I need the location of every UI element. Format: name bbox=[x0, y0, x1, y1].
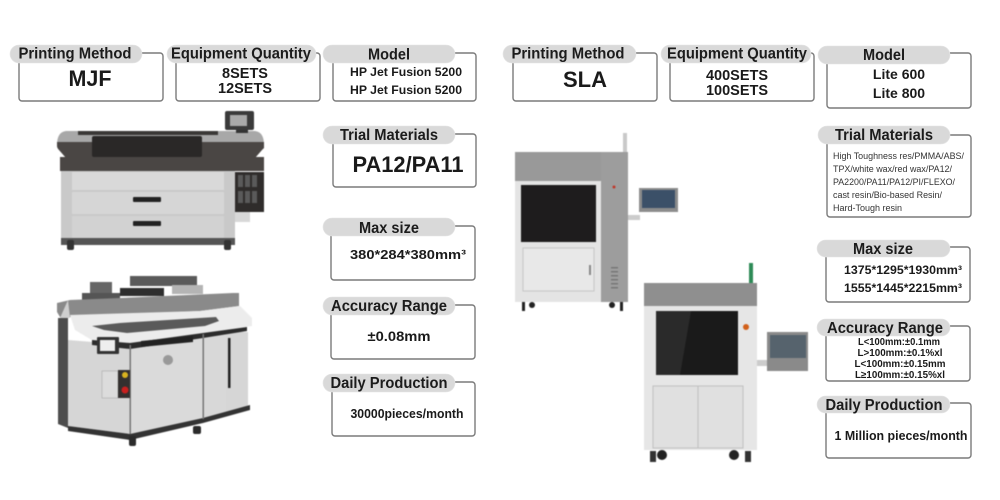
value: set counts: 8SETS bbox=[222, 66, 268, 82]
value: SLA: SLA bbox=[563, 67, 607, 92]
panel: SLA printing method bbox=[503, 45, 657, 101]
heading: printing method: Printing Method bbox=[18, 46, 132, 62]
heading: accuracy range: Accuracy Range bbox=[331, 298, 447, 315]
panel: MJF equipment quantity bbox=[167, 45, 320, 101]
heading: daily production: Daily Production bbox=[826, 397, 942, 414]
value: material list bbox=[833, 151, 964, 213]
panel: SLA daily production bbox=[817, 396, 971, 458]
value: material list: PA2200/PA11/PA12/PI/FLEXO/ bbox=[833, 177, 955, 187]
value: model names: HP Jet Fusion 5200 bbox=[350, 83, 462, 97]
value: material list: cast resin/Bio-based Resin/ bbox=[833, 190, 942, 200]
heading: max size: Max size bbox=[853, 241, 913, 258]
value: set counts: 12SETS bbox=[218, 81, 272, 97]
value: set counts: 100SETS bbox=[706, 83, 768, 99]
value: accuracy lines bbox=[854, 337, 946, 381]
value: set counts bbox=[706, 68, 768, 99]
heading: model: Model bbox=[368, 46, 410, 64]
value: max sizes: 1375*1295*1930mm³ bbox=[844, 263, 962, 277]
heading: accuracy range: Accuracy Range bbox=[827, 320, 943, 337]
heading: equipment quantity: Equipment Quantity bbox=[667, 46, 807, 62]
icon: HP Jet Fusion 3D printer bbox=[57, 276, 252, 446]
value: MJF: MJF bbox=[68, 66, 112, 91]
heading: printing method: Printing Method bbox=[512, 46, 624, 62]
heading: model: Model bbox=[863, 47, 905, 64]
value: daily production: 30000pieces/month bbox=[350, 407, 464, 421]
value: accuracy lines: L>100mm:±0.1%xl bbox=[858, 348, 943, 359]
value: set counts bbox=[218, 66, 272, 97]
value: daily production: 1 Million pieces/month bbox=[834, 429, 968, 443]
panel: SLA trial materials bbox=[818, 126, 971, 217]
panel: SLA accuracy range bbox=[817, 319, 970, 381]
value: model names: Lite 800 bbox=[873, 85, 925, 101]
value: accuracy lines: L<100mm:±0.15mm bbox=[854, 359, 946, 370]
icon: Lite 800 SLA machine bbox=[644, 263, 808, 462]
panel: SLA equipment quantity bbox=[661, 45, 814, 101]
panel: MJF model bbox=[323, 45, 476, 101]
heading: equipment quantity: Equipment Quantity bbox=[171, 46, 311, 62]
value: max sizes bbox=[844, 263, 962, 295]
value: model names bbox=[873, 66, 925, 101]
heading: daily production: Daily Production bbox=[330, 375, 448, 392]
panel: MJF daily production bbox=[323, 374, 475, 436]
value: material list: High Toughness res/PMMA/ABS/ bbox=[833, 151, 964, 161]
value: accuracy lines: L<100mm:±0.1mm bbox=[858, 337, 940, 348]
panel: SLA model bbox=[818, 46, 971, 108]
panel: MJF trial materials bbox=[323, 126, 476, 187]
heading: max size: Max size bbox=[359, 220, 419, 237]
icon: large format MJF printer bbox=[57, 111, 264, 250]
value: model names bbox=[350, 65, 462, 97]
value: material list: TPX/white wax/red wax/PA12/ bbox=[833, 164, 952, 174]
panel: SLA max size bbox=[817, 240, 970, 302]
panel: MJF max size bbox=[323, 218, 475, 280]
value: max size: 380*284*380mm³ bbox=[350, 248, 466, 262]
icon: Lite 600 SLA machine bbox=[515, 133, 678, 311]
value: accuracy: ±0.08mm bbox=[368, 328, 430, 344]
heading: trial materials: Trial Materials bbox=[340, 127, 438, 144]
value: PA12/PA11: PA12/PA11 bbox=[352, 152, 464, 177]
heading: trial materials: Trial Materials bbox=[835, 127, 933, 144]
value: set counts: 400SETS bbox=[706, 68, 768, 84]
panel: MJF printing method bbox=[10, 45, 163, 101]
value: material list: Hard-Tough resin bbox=[833, 203, 902, 213]
value: model names: Lite 600 bbox=[873, 66, 925, 82]
value: max sizes: 1555*1445*2215mm³ bbox=[844, 281, 962, 295]
value: model names: HP Jet Fusion 5200 bbox=[350, 65, 462, 79]
value: accuracy lines: L≥100mm:±0.15%xl bbox=[855, 370, 945, 381]
panel: MJF accuracy range bbox=[323, 297, 475, 359]
